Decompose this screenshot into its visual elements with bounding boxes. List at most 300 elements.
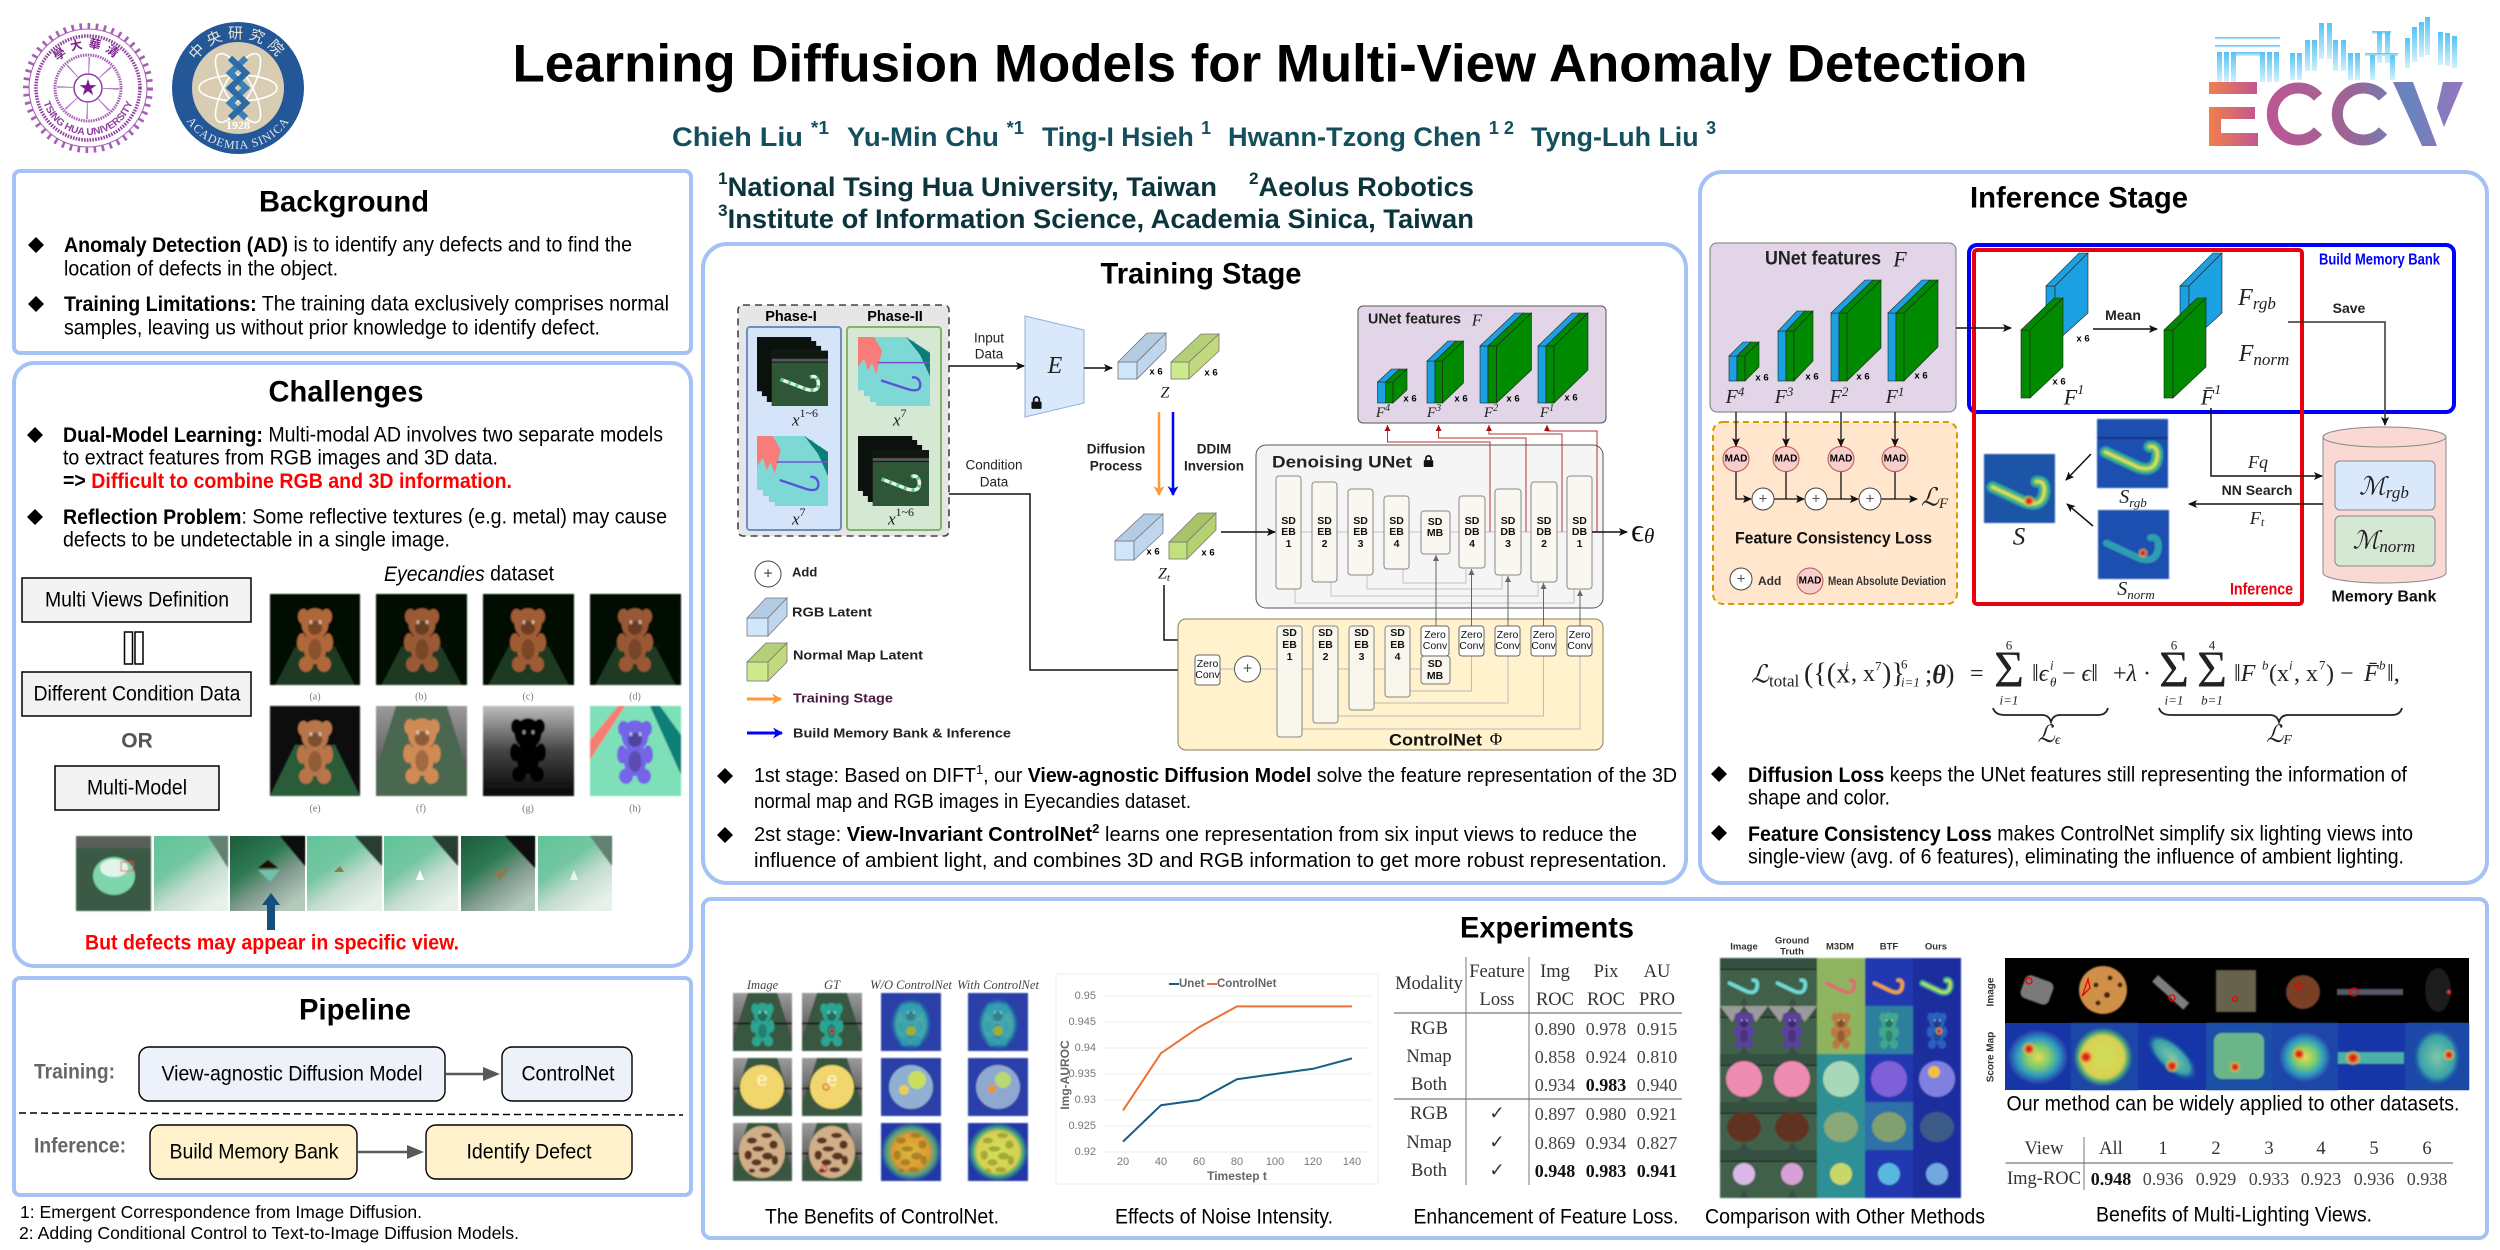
- image grid: eyecandies bears: (g): [522, 804, 534, 814]
- table: feature loss results: RGB: [1410, 1104, 1448, 1124]
- panel: UNet features: F: [1376, 405, 1385, 421]
- caption: benefits of multi-lighting views: Benefits of Multi-Lighting Views.: [2096, 1204, 2372, 1226]
- table: feature loss results: ROC: [1587, 990, 1625, 1010]
- caption: benefits of ControlNet: The Benefits of ControlNet.: [765, 1206, 999, 1228]
- figure: benefits of ControlNet: With ControlNet: [957, 978, 1039, 992]
- authors: *1: [811, 118, 829, 138]
- heatmap: S: S: [2013, 524, 2026, 550]
- callout: defects appear in specific view: But defects may appear in specific view.: [85, 932, 459, 954]
- bullet: 2nd stage: influence of ambient light, and combines 3D and RGB information to get more robust representation.: [754, 850, 1667, 872]
- table: feature loss results: 0.948: [1535, 1161, 1575, 1181]
- line chart: effects of noise intensity: 100: [1266, 1156, 1284, 1168]
- latent cuboids Zt: t: [1167, 572, 1171, 584]
- feature sheets F1: x 6: [2052, 376, 2066, 388]
- figure: benefits of ControlNet: W/O ControlNet: [870, 978, 952, 992]
- heading: Experiments: Experiments: [1460, 912, 1634, 944]
- panel: feature consistency loss: MAD: [1775, 454, 1797, 464]
- panel: denoising UNet: SD: [1389, 515, 1404, 527]
- bullet: anomaly detection: [28, 234, 632, 280]
- group: phase I and II inputs: x: [888, 510, 896, 528]
- latent cuboids Z: x 6: [1149, 366, 1163, 378]
- bullet: anomaly detection: location of defects in the object.: [64, 258, 338, 280]
- panel: ControlNet: Zero: [1497, 629, 1518, 641]
- arrow: DDIM inversion: [1172, 412, 1174, 495]
- line chart: effects of noise intensity: Img-AUROC: [1058, 1040, 1072, 1110]
- figure: other datasets image and score map: [1986, 958, 2469, 1090]
- table: feature loss results: Both: [1411, 1161, 1447, 1181]
- label: OR: OR: [121, 730, 153, 752]
- panel: ControlNet: ControlNet: [1389, 730, 1482, 750]
- panel: ControlNet: Zero: [1533, 629, 1554, 641]
- box: view-agnostic diffusion model: [139, 1047, 445, 1101]
- arrows: ControlNet to UNet: [1436, 555, 1580, 626]
- panel: ControlNet: Conv: [1459, 640, 1485, 652]
- label: diffusion process: [1087, 442, 1145, 474]
- panel: denoising UNet: EB: [1389, 526, 1404, 538]
- caption: eyecandies dataset: Eyecandies dataset: [384, 562, 554, 586]
- authors: Hwann-Tzong Chen: [1228, 122, 1480, 152]
- table: multi-lighting views: 3: [2264, 1139, 2274, 1159]
- panel: background: [14, 171, 691, 353]
- panel: denoising UNet: DB: [1500, 526, 1516, 538]
- box: different condition data: Different Condition Data: [34, 682, 241, 706]
- heatmap: S norm: S: [2117, 578, 2127, 600]
- panel: pipeline: [14, 978, 691, 1195]
- table: feature loss results: 0.921: [1637, 1104, 1677, 1124]
- table: multi-lighting views: 2: [2211, 1139, 2221, 1159]
- panel: feature consistency loss: F: [1938, 496, 1949, 512]
- formula: total loss: F: [2282, 732, 2292, 748]
- formula: total loss: i: [2050, 658, 2054, 672]
- table: multi-lighting views: 0.923: [2301, 1169, 2341, 1189]
- formula: total loss: Σ: [2197, 642, 2227, 698]
- table: multi-lighting views: [2006, 1137, 2453, 1190]
- panel: denoising UNet: 4: [1394, 538, 1400, 550]
- group: phase I and II inputs: 7: [901, 406, 907, 420]
- bullet: feature consistency loss: single-view (avg. of 6 features), eliminating the influence of ambient lighting.: [1748, 846, 2404, 868]
- box: controlnet: [502, 1047, 632, 1101]
- arrow: diffusion process: [1158, 412, 1160, 495]
- feature sheets mean F1: [2164, 253, 2222, 410]
- panel: UNet features: F: [1540, 405, 1549, 421]
- frame: build memory bank: [1969, 245, 2454, 412]
- box: multi views definition: [22, 578, 251, 622]
- panel: UNet features: [1358, 306, 1606, 423]
- panel: ControlNet: SD: [1428, 658, 1443, 670]
- formula: total loss: 7: [1875, 658, 1882, 674]
- label: inference: Inference:: [34, 1134, 126, 1158]
- table: feature loss results: Modality: [1395, 974, 1464, 994]
- formula: total loss: i=1: [2165, 692, 2183, 708]
- table: feature loss results: [1394, 957, 1682, 1185]
- formula: total loss: ℒ: [2038, 722, 2055, 748]
- line chart: effects of noise intensity: 20: [1117, 1156, 1129, 1168]
- table: feature loss results: 0.890: [1535, 1019, 1575, 1039]
- affiliations: [718, 168, 1474, 234]
- formula: total loss: 7: [2319, 658, 2326, 672]
- group: phase I and II inputs: 7: [800, 505, 806, 519]
- panel: feature consistency loss: Mean Absolute Deviation: [1828, 574, 1946, 588]
- bullet: dual-model learning: => Difficult to combine RGB and 3D information.: [63, 470, 512, 492]
- panel: denoising UNet: Denoising UNet: [1272, 452, 1412, 472]
- figure: other datasets image and score map: Score Map: [1986, 1032, 1996, 1082]
- panel: inference UNet features: F: [1892, 246, 1907, 272]
- memory bank cylinder: ℳ: [2359, 474, 2386, 500]
- figure: comparison with other methods: BTF: [1880, 942, 1898, 952]
- label: training: Training:: [34, 1060, 115, 1084]
- authors: [672, 118, 1716, 152]
- panel: feature consistency loss: Add: [1758, 574, 1781, 588]
- affiliations: 1: [718, 168, 728, 188]
- arrow: encoder to Z: [1084, 367, 1112, 369]
- panel: UNet features: 4: [1385, 402, 1390, 414]
- authors: 1 2: [1489, 118, 1514, 138]
- image grid: eyecandies bears: (b): [415, 692, 427, 702]
- table: feature loss results: Both: [1411, 1075, 1447, 1095]
- line chart: effects of noise intensity: 40: [1155, 1156, 1167, 1168]
- bullet: dual-model learning: [27, 424, 663, 492]
- figure: other datasets image and score map: Image: [1986, 977, 1996, 1006]
- table: feature loss results: Pix: [1594, 962, 1619, 982]
- group: phase I and II inputs: x: [792, 410, 800, 430]
- group: phase I and II inputs: Phase-I: [765, 309, 817, 325]
- line chart: effects of noise intensity: 80: [1231, 1156, 1243, 1168]
- panel: UNet features: x 6: [1506, 394, 1520, 404]
- bullet: diffusion loss: [1711, 764, 2407, 810]
- heading: Pipeline: Pipeline: [299, 994, 411, 1026]
- image grid: eyecandies bears: (e): [309, 804, 321, 814]
- latent cuboids Z: x 6: [1204, 368, 1218, 378]
- panel: UNet features: F: [1484, 405, 1493, 421]
- line chart: effects of noise intensity: 0.92: [1075, 1146, 1096, 1158]
- arrows: features to MAD: [1736, 412, 1895, 446]
- line chart: effects of noise intensity: [1056, 974, 1378, 1184]
- formula: total loss: (x: [2269, 661, 2289, 687]
- panel: ControlNet: Zero: [1197, 658, 1218, 670]
- line chart: effects of noise intensity: 140: [1343, 1156, 1361, 1168]
- figure: comparison with other methods: [1720, 936, 1961, 1198]
- line chart: effects of noise intensity: 0.94: [1075, 1042, 1096, 1054]
- label: epsilon theta: ϵ: [1631, 512, 1644, 548]
- legend: [747, 561, 1011, 740]
- bullet: anomaly detection: Anomaly Detection (AD) is to identify any defects and to find the: [64, 234, 632, 256]
- table: feature loss results: Nmap: [1406, 1047, 1452, 1067]
- box: multi views definition: Multi Views Definition: [45, 588, 229, 612]
- authors: Yu-Min Chu: [847, 122, 995, 152]
- table: feature loss results: 0.810: [1637, 1047, 1677, 1067]
- logo: Academia Sinica seal: 中央研究院: [189, 26, 285, 58]
- heatmap: S: [1984, 454, 2055, 550]
- label: DDIM inversion: [1184, 442, 1244, 474]
- formula: total loss: F̄: [2363, 661, 2379, 687]
- formula: total loss: [1751, 638, 2402, 748]
- panel: inference UNet features: F: [1726, 386, 1738, 408]
- bullet: 2nd stage: [717, 820, 1667, 872]
- footnotes: 2: Adding Conditional Control to Text-to-Image Diffusion Models.: [19, 1223, 519, 1243]
- encoder E: E: [1047, 353, 1063, 379]
- bullet: reflection problem: [27, 506, 667, 552]
- labels: F rgb and F norm: F: [2239, 341, 2253, 367]
- panel: feature consistency loss: MAD: [1725, 454, 1747, 464]
- logo: ECCV 2024: [2209, 17, 2463, 146]
- frame: inference: [1974, 250, 2302, 604]
- figure: comparison with other methods: Ground: [1775, 936, 1809, 946]
- latent cuboids Zt: Z: [1158, 566, 1167, 582]
- table: feature loss results: 0.897: [1535, 1104, 1575, 1124]
- table: multi-lighting views: 1: [2158, 1139, 2168, 1159]
- formula: total loss: ϵ: [2055, 732, 2062, 748]
- panel: inference UNet features: 2: [1842, 384, 1849, 398]
- formula: total loss: i=1: [1901, 674, 1920, 690]
- panel: challenges: [14, 363, 691, 966]
- latent cuboids Z: Z: [1161, 384, 1171, 402]
- title: Learning Diffusion Models for Multi-View Anomaly Detection: [512, 34, 2028, 94]
- panel: denoising UNet: 3: [1505, 538, 1511, 550]
- panel: UNet features: x 6: [1564, 392, 1578, 404]
- caption: enhancement of feature loss: Enhancement of Feature Loss.: [1414, 1206, 1678, 1228]
- box: multi-model: [55, 766, 219, 810]
- panel: feature consistency loss: +: [1866, 490, 1875, 508]
- feature sheets F1: [2021, 253, 2090, 410]
- logo: Tsing Hua University seal: 學大華清: [52, 38, 120, 60]
- formula: total loss: )}: [1882, 658, 1905, 690]
- bullet: 1st stage: normal map and RGB images in Eyecandies dataset.: [754, 791, 1191, 813]
- panel: denoising UNet: SD: [1428, 516, 1443, 528]
- legend: Training Stage: [793, 690, 893, 706]
- panel: UNet features: 1: [1549, 402, 1554, 414]
- caption: effects of noise intensity: Effects of Noise Intensity.: [1115, 1206, 1333, 1228]
- panel: denoising UNet: 1: [1577, 538, 1583, 550]
- panel: UNet features: x 6: [1403, 394, 1417, 404]
- label: input data: Data: [975, 346, 1004, 362]
- panel: inference UNet features: F: [1830, 386, 1842, 408]
- panel: ControlNet: SD: [1318, 627, 1333, 639]
- formula: total loss: total: [1769, 672, 1799, 690]
- affiliations: 3: [718, 200, 728, 220]
- table: feature loss results: 0.869: [1535, 1133, 1575, 1153]
- table: feature loss results: 0.934: [1586, 1133, 1626, 1153]
- panel: denoising UNet: 1: [1286, 538, 1292, 550]
- panel: ControlNet: 1: [1287, 651, 1293, 663]
- panel: inference UNet features: x 6: [1805, 372, 1819, 382]
- labels: F rgb and F norm: norm: [2253, 350, 2289, 368]
- image grid: eyecandies bears: (c): [522, 692, 534, 702]
- panel: ControlNet: Zero: [1461, 629, 1482, 641]
- legend: Normal Map Latent: [793, 648, 924, 662]
- table: multi-lighting views: 0.948: [2091, 1169, 2131, 1189]
- table: multi-lighting views: 0.929: [2196, 1169, 2236, 1189]
- panel: denoising UNet: EB: [1281, 526, 1296, 538]
- figure: benefits of ControlNet: GT: [824, 978, 841, 992]
- logo: Academia Sinica seal: [172, 22, 304, 154]
- panel: feature consistency loss: MAD: [1884, 454, 1906, 464]
- label: diffusion process: Process: [1090, 458, 1142, 474]
- authors: 1: [1201, 118, 1211, 138]
- panel: UNet features: 3: [1435, 402, 1441, 414]
- arrow: NN search: F: [2250, 508, 2261, 528]
- line chart: effects of noise intensity: 0.925: [1068, 1120, 1096, 1132]
- figure: benefits of ControlNet: e: [756, 1069, 768, 1091]
- table: feature loss results: RGB: [1410, 1019, 1448, 1039]
- panel: ControlNet: SD: [1354, 627, 1369, 639]
- panel: ControlNet: 2: [1323, 651, 1329, 663]
- memory bank cylinder: [2323, 427, 2446, 606]
- panel: ControlNet: 3: [1359, 651, 1365, 663]
- panel: inference stage: [1700, 172, 2487, 883]
- panel: ControlNet: EB: [1390, 639, 1405, 651]
- panel: ControlNet: [1178, 619, 1603, 750]
- formula: total loss: b: [2262, 658, 2269, 672]
- arrow: NN search: [2189, 482, 2323, 529]
- legend: Build Memory Bank & Inference: [793, 726, 1011, 740]
- formula: total loss: ({(x: [1804, 658, 1850, 690]
- latent cuboids Zt: x 6: [1201, 548, 1215, 558]
- panel: ControlNet: Conv: [1531, 640, 1557, 652]
- formula: total loss: ‖ϵ: [2032, 661, 2050, 687]
- arrows: to combined score: [2066, 454, 2093, 526]
- formula: total loss: 6: [2006, 638, 2013, 652]
- panel: inference UNet features: F: [1886, 386, 1898, 408]
- bullet: 2nd stage: 2st stage: View-Invariant ControlNet: [754, 824, 1091, 846]
- logo: Academia Sinica seal: ACADEMIA SINICA: [186, 119, 289, 150]
- panel: denoising UNet: SD: [1465, 515, 1480, 527]
- bullet: dual-model learning: to extract features from RGB images and 3D data.: [63, 446, 498, 470]
- arrow: to controlnet: [446, 1067, 500, 1081]
- panel: ControlNet: EB: [1354, 639, 1369, 651]
- arrow: mean: [2093, 307, 2157, 329]
- arrows: UNet to features: [1388, 425, 1597, 532]
- bullet: 1st stage: 1: [976, 762, 983, 776]
- table: feature loss results: 0.978: [1586, 1019, 1626, 1039]
- panel: feature consistency loss: +: [1759, 490, 1768, 508]
- panel: ControlNet: Zero: [1569, 629, 1590, 641]
- table: feature loss results: ✓: [1489, 1133, 1505, 1153]
- panel: ControlNet: EB: [1282, 639, 1297, 651]
- labels: F rgb and F norm: [2237, 285, 2289, 368]
- formula: total loss: 6: [2171, 638, 2178, 652]
- bullet: 1st stage: [717, 762, 1677, 813]
- panel: inference UNet features: 1: [1898, 384, 1904, 398]
- memory bank cylinder: ℳ: [2353, 528, 2379, 554]
- panel: inference UNet features: F: [1775, 386, 1787, 408]
- panel: UNet features: F: [1471, 310, 1483, 330]
- panel: ControlNet: SD: [1282, 627, 1297, 639]
- arrow: query features: [2211, 408, 2322, 476]
- table: feature loss results: Feature: [1469, 962, 1525, 982]
- panel: denoising UNet: DB: [1464, 526, 1480, 538]
- table: multi-lighting views: 4: [2316, 1139, 2326, 1159]
- panel: inference UNet features: x 6: [1914, 370, 1928, 382]
- caption: comparison with other methods: Comparison with Other Methods: [1705, 1206, 1985, 1228]
- image grid: eyecandies bears: (f): [416, 804, 426, 814]
- bullet: diffusion loss: Diffusion Loss keeps the UNet features still representing the information of: [1748, 764, 2407, 786]
- table: feature loss results: ✓: [1489, 1104, 1505, 1124]
- formula: total loss: i: [2289, 658, 2293, 672]
- latent cuboids Z: [1118, 333, 1219, 402]
- group: phase I and II inputs: Phase-II: [867, 309, 923, 325]
- box: identify defect: Identify Defect: [466, 1140, 592, 1164]
- box: identify defect: [426, 1125, 632, 1179]
- table: feature loss results: 0.983: [1586, 1161, 1626, 1181]
- panel: denoising UNet: SD: [1501, 515, 1516, 527]
- group: phase I and II inputs: 1~6: [800, 406, 818, 420]
- bullet: training limitations: samples, leaving us without prior knowledge to identify defect.: [64, 316, 600, 340]
- table: feature loss results: PRO: [1639, 990, 1675, 1010]
- formula: total loss: i: [1845, 658, 1849, 674]
- panel: experiments: [703, 899, 2487, 1238]
- heading: Inference Stage: Inference Stage: [1970, 182, 2188, 214]
- heatmap: S norm: [2098, 510, 2169, 602]
- panel: ControlNet: 4: [1395, 651, 1401, 663]
- figure: comparison with other methods: M3DM: [1826, 942, 1854, 952]
- bullet: 2nd stage: learns one representation from six input views to reduce the: [1099, 824, 1637, 846]
- panel: feature consistency loss: MAD: [1799, 576, 1821, 586]
- line chart: effects of noise intensity: 60: [1193, 1156, 1205, 1168]
- arrow: features to F1: [1956, 327, 2011, 329]
- feature sheets mean F1: F̄: [2201, 384, 2214, 410]
- bullet: 1st stage: 1st stage: Based on DIFT: [754, 765, 981, 787]
- memory bank cylinder: Memory Bank: [2332, 588, 2437, 606]
- panel: ControlNet: MB: [1427, 670, 1444, 682]
- panel: denoising UNet: DB: [1536, 526, 1552, 538]
- panel: training stage: [703, 244, 1686, 883]
- encoder E: [1025, 316, 1084, 417]
- panel: denoising UNet: EB: [1317, 526, 1332, 538]
- bullet: 2nd stage: 2: [1092, 820, 1099, 836]
- frame: build memory bank: Build Memory Bank: [2319, 252, 2440, 268]
- formula: total loss: Σ: [2159, 642, 2189, 698]
- line chart: effects of noise intensity: 0.935: [1068, 1068, 1096, 1080]
- figure: benefits of ControlNet: Image: [746, 978, 779, 992]
- table: feature loss results: 0.940: [1637, 1075, 1677, 1095]
- line chart: effects of noise intensity: 0.93: [1075, 1094, 1096, 1106]
- panel: inference UNet features: 3: [1786, 384, 1794, 398]
- memory bank cylinder: norm: [2379, 536, 2415, 556]
- panel: inference UNet features: 4: [1738, 384, 1745, 398]
- image grid: eyecandies bears: (h): [629, 804, 641, 814]
- heatmap: S rgb: S: [2119, 486, 2129, 508]
- memory bank cylinder: rgb: [2386, 482, 2409, 502]
- line chart: effects of noise intensity: Timestep t: [1207, 1169, 1267, 1183]
- logo: Tsing Hua University seal: [23, 23, 153, 153]
- table: multi-lighting views: 0.936: [2143, 1169, 2183, 1189]
- bullet: feature consistency loss: Feature Consistency Loss makes ControlNet simplify six lighting views into: [1748, 822, 2413, 846]
- affiliations: Institute of Information Science, Academia Sinica, Taiwan: [728, 204, 1474, 234]
- box: controlnet: ControlNet: [522, 1062, 615, 1086]
- panel: ControlNet: EB: [1318, 639, 1333, 651]
- line chart: effects of noise intensity: 0.945: [1068, 1016, 1096, 1028]
- heading: Training Stage: Training Stage: [1100, 258, 1302, 290]
- formula: total loss: ‖F: [2234, 661, 2256, 687]
- line chart: effects of noise intensity: 0.95: [1075, 990, 1096, 1002]
- frame: inference: Inference: [2230, 580, 2293, 598]
- arrow: NN search: NN Search: [2222, 482, 2292, 498]
- figure: comparison with other methods: Truth: [1780, 946, 1804, 958]
- bullet: reflection problem: Reflection Problem: Some reflective textures (e.g. metal) may cause: [63, 506, 667, 528]
- group: phase I and II inputs: [738, 305, 949, 536]
- figure: benefits of ControlNet: e: [826, 1069, 838, 1091]
- table: feature loss results: ROC: [1536, 990, 1574, 1010]
- table: feature loss results: 0.915: [1637, 1019, 1677, 1039]
- bullet: training limitations: [28, 292, 669, 340]
- formula: total loss: =: [1970, 661, 1984, 687]
- panel: denoising UNet: DB: [1572, 526, 1587, 538]
- logo: Tsing Hua University seal: ★: [79, 78, 97, 98]
- panel: feature consistency loss: MAD: [1830, 454, 1852, 464]
- line chart: effects of noise intensity: 120: [1304, 1156, 1322, 1168]
- image grid: eyecandies bears: (d): [629, 692, 641, 702]
- panel: ControlNet: Zero: [1424, 629, 1446, 641]
